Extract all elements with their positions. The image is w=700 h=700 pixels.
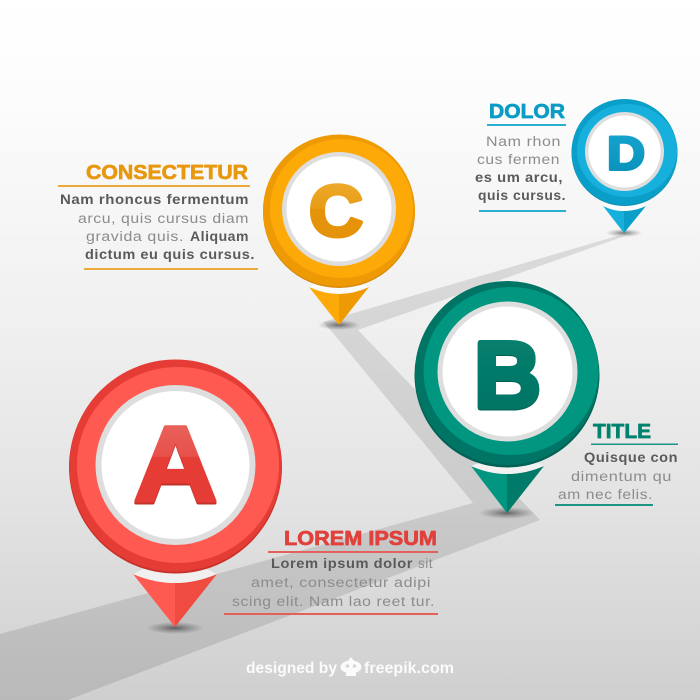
body: title [558,450,678,502]
pin D [572,99,678,237]
body: lorem ipsum: Lorem ipsum dolor [271,556,413,571]
body: title: dimentum qu [571,469,672,484]
body: consectetur: Nam rhoncus fermentum [60,192,249,207]
heading: dolor: DOLOR [489,101,566,123]
text block: dolor [475,101,566,212]
letter B: B [474,322,541,427]
pin B pointer [471,466,544,513]
body: consectetur: Aliquam [190,229,249,244]
body: dolor: cus fermen [477,152,560,167]
freepik credit: designed by [246,660,337,677]
pin B disc [414,281,600,474]
pin B shadow [479,507,535,519]
pin C shadow [318,320,360,330]
letter D: D [607,126,645,180]
body: lorem ipsum: scing elit. Nam lao reet tur. [232,594,435,609]
pin A disc [69,360,282,583]
pin C [263,134,415,330]
pin D disc [572,99,678,211]
body: consectetur [60,192,255,262]
freepik credit: freepik.com [364,660,454,677]
road path [0,236,625,700]
body: dolor: quis cursus. [478,188,566,203]
icon: freepik logo [340,657,362,676]
letter C: C [309,172,363,252]
body: lorem ipsum: amet, consectetur adipi [251,575,431,590]
body: title: Quisque con [584,450,678,465]
pin B [414,281,600,519]
text block: title [555,421,678,506]
pin A [69,360,282,634]
heading: title: TITLE [593,421,651,443]
body: dolor: Nam rhon [486,134,561,149]
body: lorem ipsum [232,556,435,609]
pin D pointer [603,206,646,233]
pin D shadow [606,229,642,237]
pin C disc [263,134,415,294]
pin C pointer [309,287,369,325]
heading: lorem ipsum: LOREM IPSUM [284,528,437,550]
pin A shadow [146,622,204,634]
body: title: am nec felis. [558,487,653,502]
body: dolor: es um arcu, [475,170,563,185]
heading: consectetur: CONSECTETUR [86,162,249,184]
body: consectetur: arcu, quis cursus diam [78,211,249,226]
body: consectetur: gravida quis. [86,229,184,244]
body: dolor [475,134,566,203]
letter A: A [133,403,218,524]
body: lorem ipsum: sit [418,556,433,571]
text block: consectetur [58,162,258,270]
pin A pointer [133,574,217,627]
text block: lorem ipsum [224,528,438,615]
freepik credit [246,657,454,677]
body: consectetur: dictum eu quis cursus. [85,247,255,262]
